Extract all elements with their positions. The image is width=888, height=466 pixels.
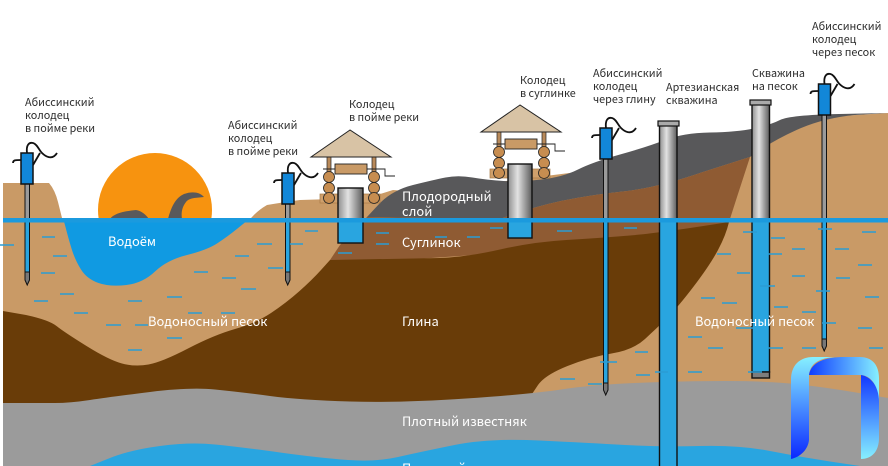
artesian borehole	[658, 121, 679, 466]
label: pump well floodplain left: в пойме реки	[25, 120, 95, 136]
soil: water-bearing sand base	[3, 113, 888, 466]
layer label: dense limestone: Плотный известняк	[402, 411, 527, 430]
layer label: loam: Суглинок	[402, 232, 461, 251]
label: well in loam: в суглинке	[520, 85, 576, 101]
layer label: sand right: Водоносный песок	[695, 311, 814, 330]
label: sand borehole: Скважина	[752, 65, 805, 81]
layer label: pond: Водоём	[108, 231, 156, 250]
soil: loam	[330, 157, 750, 265]
pump well 2	[274, 163, 318, 285]
pump well 1	[13, 143, 57, 285]
label: artesian borehole: Артезианская	[666, 79, 739, 95]
label: well floodplain: в пойме реки	[349, 109, 419, 125]
well 2 in loam	[481, 105, 565, 238]
label: pump well through sand: Абиссинский	[812, 18, 881, 34]
soil: dense limestone	[3, 381, 888, 466]
soil: porous limestone aquifer	[90, 440, 860, 466]
label: pump well floodplain right: колодец	[228, 130, 273, 146]
pump well 3 through clay	[592, 118, 636, 395]
label: pump well floodplain right: в пойме реки	[228, 143, 298, 159]
label: sand borehole: на песок	[752, 78, 798, 94]
pond	[63, 218, 248, 286]
layer label: clay: Глина	[402, 311, 439, 330]
label: pump well through sand: колодец	[812, 31, 857, 47]
soil: fertile topsoil	[367, 113, 888, 219]
groundwater dashes	[0, 228, 883, 384]
logo	[791, 357, 879, 459]
sand borehole	[750, 100, 771, 378]
label: artesian borehole: скважина	[666, 92, 718, 108]
pump well 4 through sand	[810, 74, 854, 351]
label: well floodplain: Колодец	[349, 96, 394, 112]
label: pump well through clay: колодец	[593, 78, 638, 94]
label: well in loam: Колодец	[520, 72, 565, 88]
label: pump well through clay: через глину	[593, 91, 656, 107]
label: pump well floodplain left: колодец	[25, 107, 70, 123]
lake monster silhouette	[110, 192, 204, 219]
label: pump well floodplain left: Абиссинский	[25, 94, 94, 110]
well 1 in river floodplain	[311, 130, 395, 243]
sun	[98, 153, 212, 218]
label: pump well floodplain right: Абиссинский	[228, 117, 297, 133]
label: pump well through sand: через песок	[812, 44, 875, 60]
layer label: sand left: Водоносный песок	[148, 311, 267, 330]
label: pump well through clay: Абиссинский	[593, 65, 662, 81]
water table line	[3, 218, 888, 222]
layer label: fertile layer: Плодородный	[402, 186, 492, 205]
soil: clay	[3, 222, 729, 410]
layer label: fertile layer: слой	[402, 201, 432, 220]
